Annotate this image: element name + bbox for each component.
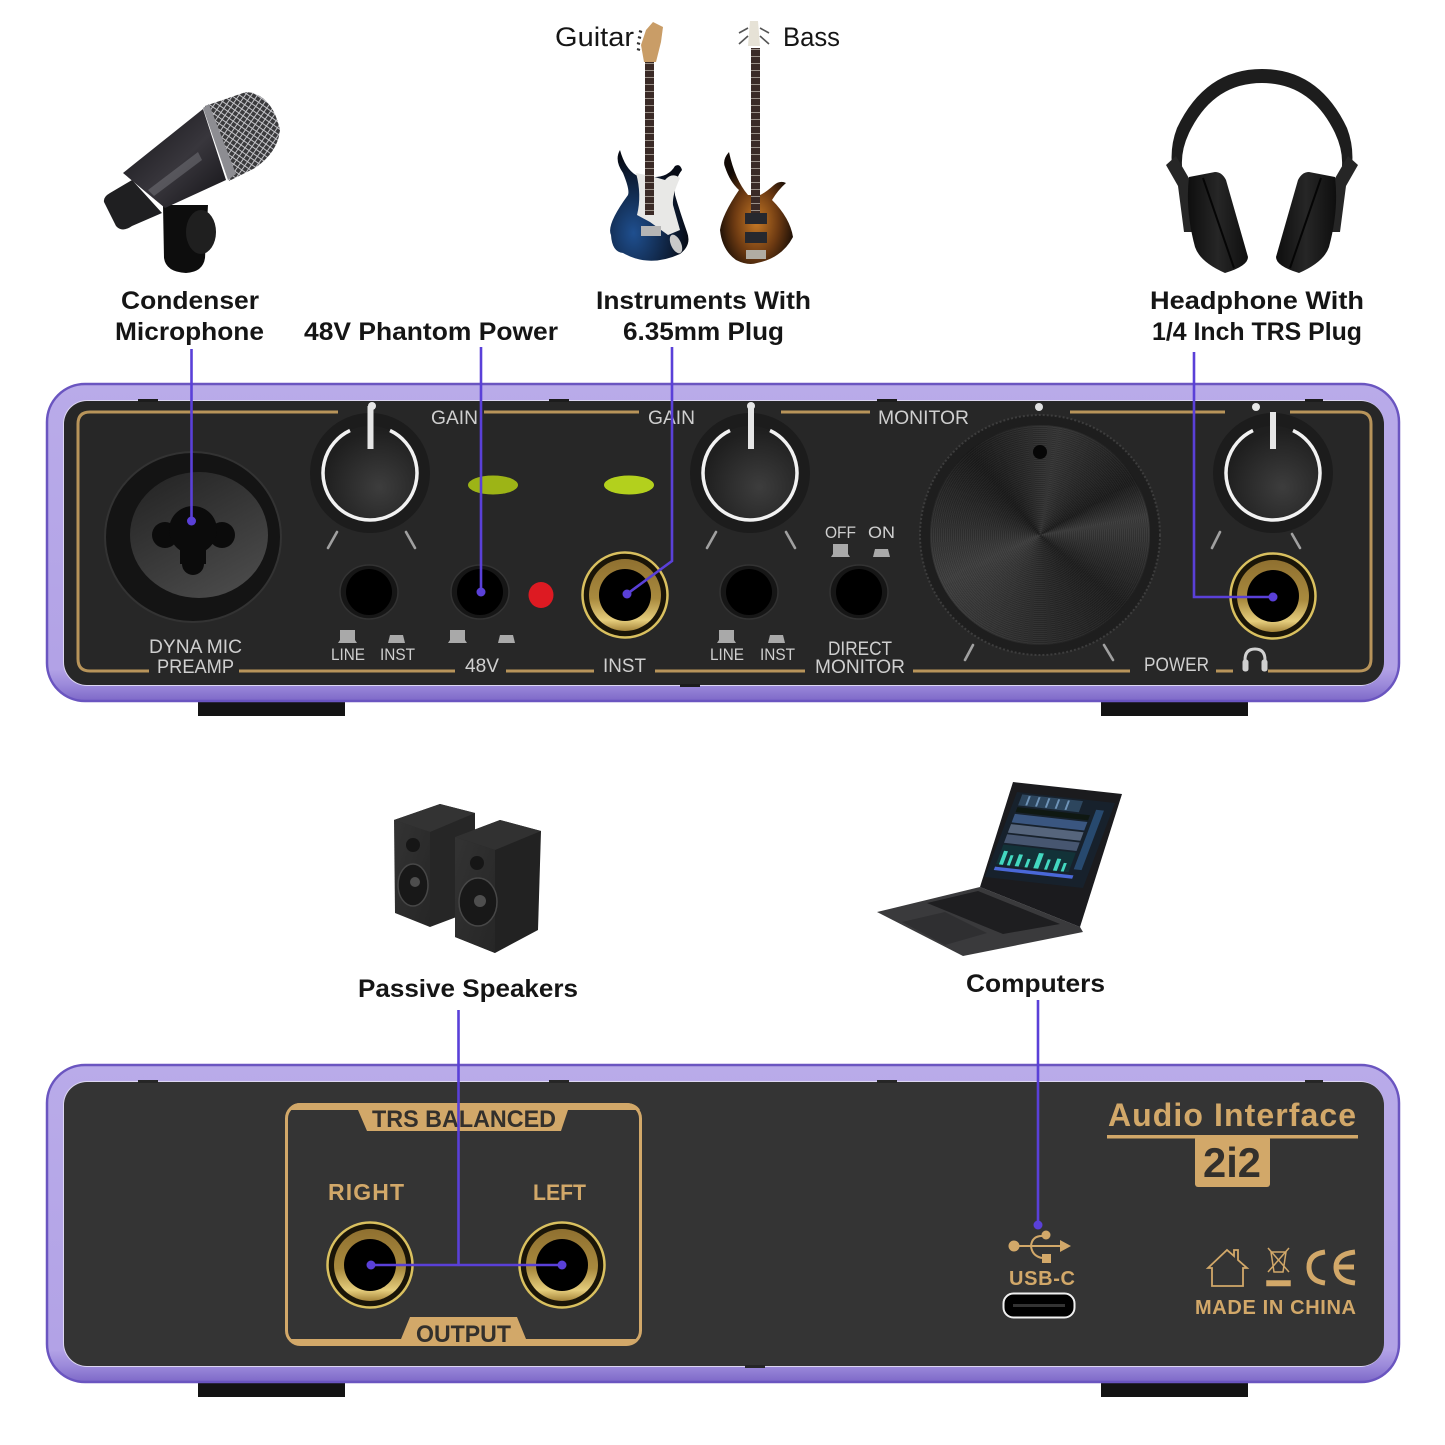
panel: front of audio interface bbox=[47, 384, 1399, 716]
small jacks bbox=[340, 565, 888, 619]
connector: passive speakers bbox=[366, 1010, 566, 1270]
image: laptop computer bbox=[877, 782, 1122, 956]
connector: headphone bbox=[1194, 352, 1278, 602]
label: condenser microphone: Condenser bbox=[121, 287, 259, 315]
label: instruments bbox=[596, 287, 811, 346]
red LED bbox=[528, 582, 554, 608]
front panel text: PREAMP bbox=[157, 657, 234, 678]
TRS balanced output box bbox=[286, 1103, 640, 1348]
label: instruments: 6.35mm Plug bbox=[623, 318, 784, 346]
front panel text: DYNA MIC bbox=[149, 637, 242, 658]
switch position icons bbox=[338, 544, 890, 643]
front panel text: LINE bbox=[710, 645, 744, 664]
TRS balanced output box: TRS BALANCED bbox=[372, 1106, 556, 1133]
TRS balanced output box: RIGHT bbox=[328, 1179, 404, 1205]
label: passive speakers: Passive Speakers bbox=[358, 975, 578, 1003]
icon: CE mark bbox=[1309, 1252, 1355, 1283]
icon: USB symbol bbox=[1008, 1230, 1071, 1263]
front panel text: ON bbox=[868, 523, 895, 542]
image: electric guitar bbox=[610, 22, 688, 261]
brand: Audio Interface 2i2 bbox=[1107, 1097, 1358, 1187]
front panel text: MONITOR bbox=[878, 408, 969, 429]
front panel text: GAIN bbox=[431, 408, 478, 429]
brand: Audio Interface 2i2: Audio Interface bbox=[1108, 1097, 1356, 1133]
label: USB-C: USB-C bbox=[1009, 1268, 1075, 1290]
image: dynamic microphone bbox=[104, 92, 280, 273]
gold frame bbox=[78, 412, 1371, 671]
label: headphone: Headphone With bbox=[1150, 287, 1364, 315]
connector: instruments bbox=[622, 347, 672, 598]
image: headphones bbox=[1166, 69, 1358, 273]
connector: 48V phantom power bbox=[476, 347, 486, 596]
icon: headphones symbol bbox=[1243, 649, 1267, 671]
gold headphone jack bbox=[1230, 554, 1316, 638]
gain knob 2 bbox=[690, 402, 810, 548]
panel: back of audio interface bbox=[47, 1065, 1399, 1397]
connector: computers bbox=[1034, 1000, 1042, 1230]
label: condenser microphone bbox=[115, 287, 264, 346]
gain knob 1 bbox=[310, 402, 430, 548]
power knob bbox=[1212, 403, 1333, 548]
monitor knob bbox=[920, 403, 1160, 660]
label: Guitar: Guitar bbox=[555, 22, 634, 52]
front panel text: INST bbox=[603, 656, 646, 677]
label: 48V phantom power: 48V Phantom Power bbox=[304, 318, 558, 346]
front feet bbox=[198, 700, 1248, 716]
front panel text: MONITOR bbox=[815, 657, 905, 678]
back feet bbox=[198, 1381, 1248, 1397]
image: passive speakers bbox=[394, 804, 541, 953]
TRS balanced output box: OUTPUT bbox=[416, 1321, 511, 1348]
green LEDs bbox=[468, 476, 654, 494]
front panel text bbox=[149, 408, 1209, 678]
front panel text: OFF bbox=[825, 523, 856, 542]
front panel text: INST bbox=[380, 645, 415, 664]
label: instruments: Instruments With bbox=[596, 287, 811, 315]
front panel text: POWER bbox=[1144, 655, 1209, 676]
gold inst jack bbox=[582, 552, 668, 638]
front panel text: DIRECT bbox=[828, 639, 892, 660]
brand: Audio Interface 2i2: 2i2 bbox=[1203, 1139, 1261, 1186]
image: bass guitar bbox=[720, 21, 793, 264]
icon: house bbox=[1208, 1250, 1247, 1286]
label: headphone: 1/4 Inch TRS Plug bbox=[1152, 318, 1362, 346]
label: Made in China: MADE IN CHINA bbox=[1195, 1297, 1356, 1319]
label: condenser microphone: Microphone bbox=[115, 318, 264, 346]
label: Bass: Bass bbox=[783, 22, 840, 52]
front panel text: GAIN bbox=[648, 408, 695, 429]
front panel text: LINE bbox=[331, 645, 365, 664]
combo XLR input bbox=[105, 452, 281, 622]
icon: crossed-out bin bbox=[1267, 1248, 1290, 1286]
label: computers: Computers bbox=[966, 970, 1105, 998]
front panel text: 48V bbox=[465, 656, 499, 677]
front panel text: INST bbox=[760, 645, 795, 664]
USB-C port bbox=[1004, 1294, 1074, 1318]
TRS balanced output box: LEFT bbox=[533, 1180, 587, 1205]
connector: microphone bbox=[187, 349, 196, 526]
label: headphone bbox=[1150, 287, 1364, 346]
